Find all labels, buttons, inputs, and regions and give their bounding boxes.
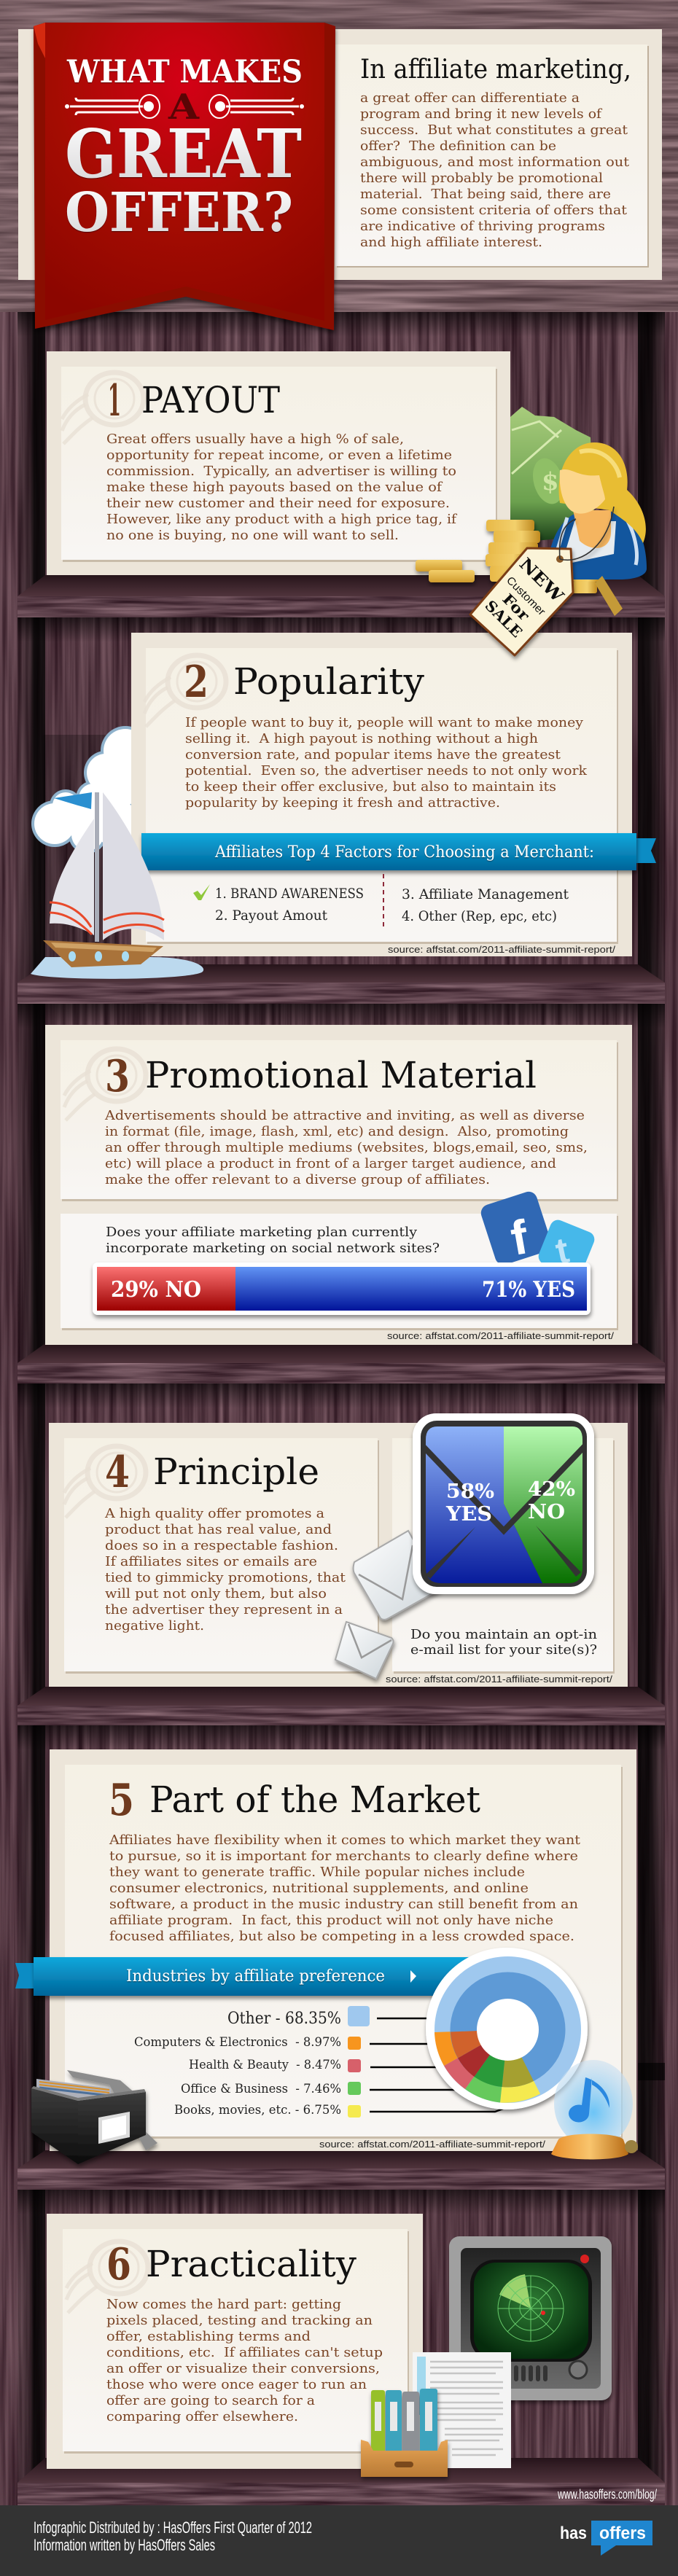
icon: binders in tray bbox=[361, 2389, 448, 2477]
banner: industries by affiliate preference bbox=[15, 1957, 471, 1996]
question bbox=[106, 1225, 440, 1256]
icon: sailboat bbox=[31, 792, 203, 979]
text block: market: software, a product in the music industry can still benefit from an bbox=[109, 1897, 578, 1912]
text block: payout: commission. Typically, an advertiser is willing to bbox=[106, 464, 456, 479]
source: source: affstat.com/2011-affiliate-summit-report/ bbox=[388, 945, 616, 955]
title: what makes a great offer: WHAT MAKES bbox=[66, 54, 303, 90]
text block: practicality: comparing offer elsewhere. bbox=[106, 2409, 298, 2424]
chart labels: 58% bbox=[446, 1480, 494, 1503]
legend: industries: Books, movies, etc. - 6.75% bbox=[174, 2103, 341, 2118]
title: what makes a great offer: OFFER? bbox=[65, 182, 293, 244]
panel: social network poll bbox=[61, 1190, 618, 1330]
legend: industries: Other - 68.35% bbox=[227, 2010, 341, 2028]
tag text: Customer bbox=[504, 574, 548, 618]
heading: payout: PAYOUT bbox=[141, 379, 280, 421]
text block: principle: A high quality offer promotes a bbox=[104, 1506, 324, 1521]
text block: practicality: conditions, etc. If affiliates can't setup bbox=[106, 2345, 383, 2360]
text block: market: consumer electronics, nutritional supplements, and online bbox=[109, 1881, 529, 1896]
text block: popularity: popularity by keeping it fresh and attractive. bbox=[185, 795, 500, 811]
icon: twitter bbox=[536, 1217, 597, 1279]
text block: promotional: etc) will place a product in front of a larger target audience, and bbox=[105, 1156, 556, 1171]
list: merchant factors right: 3. Affiliate Management bbox=[402, 886, 569, 902]
list: merchant factors left bbox=[215, 886, 364, 924]
text block: payout: make these high payouts based on the value of bbox=[106, 480, 443, 495]
question: opt-in list bbox=[410, 1627, 597, 1658]
text block: intro: and high affiliate interest. bbox=[360, 235, 542, 250]
text block: payout: their new customer and their need for exposure. bbox=[106, 496, 450, 511]
icon: coin stack bbox=[486, 520, 599, 593]
text block: payout: However, like any product with a high price tag, if bbox=[106, 512, 457, 527]
text block: payout bbox=[106, 432, 457, 543]
icon: large envelope bbox=[354, 1531, 440, 1620]
panel: 2 popularity bbox=[131, 633, 656, 956]
chart: donut of industries bbox=[426, 1948, 588, 2109]
panel: 4 principle bbox=[49, 1423, 628, 1687]
logo: hasoffers: has bbox=[560, 2524, 587, 2543]
question: opt-in list: Do you maintain an opt-in bbox=[410, 1627, 597, 1642]
text block: market bbox=[109, 1833, 581, 1944]
footer credits bbox=[34, 2518, 312, 2554]
icon: stack of money: $ bbox=[542, 467, 559, 496]
source: source: affstat.com/2011-affiliate-summit-report/ bbox=[387, 1331, 615, 1341]
banner: top 4 factors bbox=[141, 833, 656, 870]
icon: green check bbox=[193, 884, 210, 900]
text block: practicality: pixels placed, testing and tracking an bbox=[106, 2313, 373, 2328]
list: merchant factors right bbox=[402, 886, 569, 924]
number 2: 2 bbox=[184, 657, 209, 708]
number 3: 3 bbox=[105, 1051, 130, 1102]
ornament: right flourish bbox=[209, 95, 304, 118]
icon: music snow globe bbox=[551, 2060, 638, 2159]
text block: intro: success. But what constitutes a great bbox=[360, 122, 628, 138]
title: what makes a great offer bbox=[65, 54, 303, 244]
heading: part of the market: Part of the Market bbox=[149, 1779, 480, 1821]
text block: intro bbox=[360, 90, 630, 250]
list: merchant factors left: 2. Payout Amout bbox=[215, 908, 327, 924]
tag text: SALE bbox=[481, 597, 526, 641]
icon: stack of money bbox=[510, 407, 594, 543]
heading: popularity: Popularity bbox=[233, 660, 425, 703]
text block: principle: product that has real value, and bbox=[105, 1522, 332, 1537]
text block: promotional: Advertisements should be attractive and inviting, as well as diverse bbox=[104, 1108, 585, 1123]
text block: principle: tied to gimmicky promotions, that bbox=[105, 1570, 346, 1585]
tag text: NEW bbox=[515, 554, 568, 607]
icon: small envelope bbox=[335, 1622, 394, 1679]
chart: email list pie on device bbox=[413, 1413, 594, 1594]
heading: principle: Principle bbox=[153, 1451, 319, 1493]
text block: popularity: selling it. A high payout is nothing without a high bbox=[185, 731, 538, 746]
panel: 2 popularity cloud bbox=[31, 726, 150, 854]
text block: popularity: If people want to buy it, people will want to make money bbox=[185, 715, 584, 730]
list: merchant factors left: 1. BRAND AWARENESS bbox=[215, 886, 364, 902]
text block: intro: program and bring it new levels of bbox=[360, 106, 602, 122]
icon: paper document bbox=[413, 2352, 511, 2468]
legend: industries bbox=[134, 2006, 525, 2118]
text block: intro: a great offer can differentiate a bbox=[360, 90, 580, 106]
text block: promotional: in format (file, image, flash, xml, etc) and design. Also, promoting bbox=[105, 1124, 569, 1139]
icon: coins on the left bbox=[416, 560, 475, 582]
icon: twitter: t bbox=[552, 1230, 572, 1272]
icon: woman figure bbox=[547, 442, 647, 616]
text block: practicality: Now comes the hard part: getting bbox=[106, 2297, 341, 2312]
text block: market: affiliate program. In fact, this product will not only have niche bbox=[109, 1913, 553, 1928]
text block: principle: If affiliates sites or emails are bbox=[105, 1554, 317, 1569]
text block: principle: the advertiser they represent in a bbox=[105, 1602, 343, 1617]
text block: promotional: make the offer relevant to a diverse group of affiliates. bbox=[105, 1172, 490, 1187]
text block: intro: offer? The definition can be bbox=[360, 138, 556, 154]
number 4: 4 bbox=[105, 1447, 130, 1498]
heading: in affiliate marketing: In affiliate marketing, bbox=[360, 55, 631, 85]
text block: intro: material. That being said, there are bbox=[360, 187, 611, 202]
source: source: affstat.com/2011-affiliate-summit-report/ bbox=[386, 1674, 613, 1685]
chart labels bbox=[445, 1478, 575, 1526]
text block: popularity: potential. Even so, the advertiser needs to not only work bbox=[185, 763, 588, 778]
text block: payout: no one is buying, no one will want to sell. bbox=[106, 528, 399, 543]
text block: practicality: offer are going to search for a bbox=[106, 2393, 315, 2408]
panel: header intro paper bbox=[18, 29, 662, 280]
text block: popularity bbox=[185, 715, 588, 811]
legend: industries: Office & Business - 7.46% bbox=[181, 2082, 341, 2096]
panel: 3 promotional material bbox=[45, 1025, 632, 1345]
bar chart: social marketing bbox=[93, 1262, 591, 1315]
text block: intro: some consistent criteria of offers that bbox=[360, 203, 628, 218]
text block: principle: does so in a respectable fashion. bbox=[105, 1538, 338, 1553]
banner: industries by affiliate preference: Industries by affiliate preference bbox=[126, 1967, 385, 1986]
title: what makes a great offer: A bbox=[168, 87, 200, 128]
icon: file box bbox=[31, 2070, 157, 2164]
footer credits: Infographic Distributed by : HasOffers First Quarter of 2012 bbox=[34, 2518, 312, 2537]
ornament: left flourish bbox=[65, 95, 160, 118]
chart labels: YES bbox=[445, 1503, 492, 1526]
question: opt-in list: e-mail list for your site(s)? bbox=[410, 1642, 597, 1658]
heading: practicality: Practicality bbox=[146, 2243, 357, 2285]
chart labels: 42% bbox=[528, 1478, 575, 1501]
footer credits: Information written by HasOffers Sales bbox=[34, 2536, 215, 2554]
text block: practicality bbox=[106, 2297, 383, 2424]
tag text bbox=[481, 554, 568, 641]
text block: intro: ambiguous, and most information out bbox=[360, 155, 630, 170]
text block: practicality: those who were once eager to run an bbox=[106, 2377, 367, 2392]
text block: market: they want to generate traffic. While popular niches include bbox=[109, 1865, 525, 1880]
text block: principle: will put not only them, but also bbox=[105, 1586, 327, 1601]
text block: popularity: to keep their offer exclusive, but also to maintain its bbox=[185, 779, 556, 795]
icon: facebook bbox=[479, 1190, 553, 1267]
number 6: 6 bbox=[106, 2239, 131, 2290]
legend: industries: Computers & Electronics - 8.97% bbox=[134, 2035, 341, 2050]
text block: intro: are indicative of thriving programs bbox=[360, 219, 605, 234]
text block: market: to pursue, so it is important for merchants to clearly define where bbox=[109, 1849, 578, 1864]
chart labels: NO bbox=[528, 1501, 565, 1523]
text block: principle bbox=[104, 1506, 346, 1634]
question: incorporate marketing on social network sites? bbox=[106, 1241, 440, 1256]
text block: promotional bbox=[104, 1108, 588, 1187]
panel: 1 payout bbox=[47, 351, 510, 575]
title: what makes a great offer: GREAT bbox=[65, 114, 302, 193]
number 5: 5 bbox=[109, 1775, 134, 1826]
title ribbon bbox=[34, 23, 335, 330]
text block: intro: there will probably be promotional bbox=[360, 171, 603, 186]
text block: principle: negative light. bbox=[105, 1618, 204, 1634]
panel: 5 part of the market bbox=[50, 1749, 636, 2151]
text block: payout: opportunity for repeat income, or even a lifetime bbox=[106, 448, 452, 463]
footer bar bbox=[0, 2505, 678, 2576]
text block: popularity: conversion rate, and popular items have the greatest bbox=[185, 747, 561, 762]
panel: 1 payout: 1 bbox=[108, 375, 121, 426]
text block: practicality: an offer or visualize their conversions, bbox=[106, 2361, 380, 2376]
text block: market: focused affiliates, but also be competing in a less crowded space. bbox=[109, 1929, 574, 1944]
text block: payout: Great offers usually have a high % of sale, bbox=[106, 432, 404, 447]
question: Does your affiliate marketing plan currently bbox=[106, 1225, 418, 1240]
icon: sale tag bbox=[470, 507, 614, 655]
list: merchant factors right: 4. Other (Rep, epc, etc) bbox=[402, 908, 557, 924]
banner: top 4 factors: Affiliates Top 4 Factors for Choosing a Merchant: bbox=[214, 843, 594, 862]
bar chart: social marketing: 71% YES bbox=[482, 1277, 575, 1303]
bar chart: social marketing: 29% NO bbox=[111, 1277, 201, 1303]
panel: 6 practicality bbox=[47, 2214, 423, 2469]
legend: industries: Health & Beauty - 8.47% bbox=[189, 2058, 341, 2072]
text block: promotional: an offer through multiple mediums (websites, blogs,email, seo, sms, bbox=[105, 1140, 588, 1155]
text block: market: Affiliates have flexibility when it comes to which market they want bbox=[109, 1833, 581, 1848]
icon: facebook: f bbox=[507, 1209, 533, 1265]
logo: hasoffers: offers bbox=[599, 2524, 646, 2543]
tag text: For bbox=[499, 590, 534, 625]
logo: hasoffers bbox=[560, 2521, 652, 2556]
source: source: affstat.com/2011-affiliate-summit-report/ bbox=[319, 2139, 546, 2150]
heading: promotional material: Promotional Material bbox=[145, 1054, 537, 1096]
icon: radar monitor bbox=[449, 2236, 612, 2400]
text block: practicality: offer, establishing terms and bbox=[106, 2329, 311, 2344]
